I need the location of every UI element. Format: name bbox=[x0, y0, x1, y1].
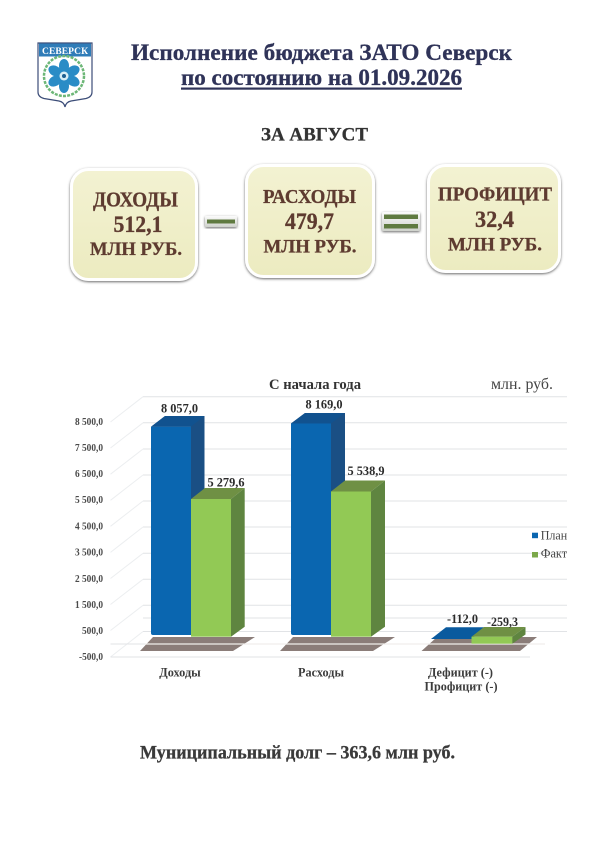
title: по состоянию на 01.09.2026 bbox=[181, 65, 462, 90]
bars: deficit / surplus bbox=[431, 627, 526, 644]
y axis labels: 8 500,0 bbox=[75, 417, 103, 428]
icon: minus sign bbox=[205, 216, 237, 227]
y axis labels: 3 500,0 bbox=[75, 548, 103, 558]
panel: surplus: 32,4 bbox=[475, 207, 514, 232]
panel: income: МЛН РУБ. bbox=[90, 239, 182, 260]
category labels: Дефицит (-) bbox=[428, 665, 493, 680]
category labels: Расходы bbox=[298, 665, 344, 680]
subheading: for August: ЗА АВГУСТ bbox=[261, 125, 368, 146]
category labels bbox=[159, 665, 498, 694]
value labels bbox=[161, 398, 518, 629]
value labels: 8 057,0 bbox=[161, 402, 198, 416]
bar shadows bbox=[140, 637, 537, 651]
y axis labels: 5 500,0 bbox=[75, 495, 103, 506]
panel: income: ДОХОДЫ bbox=[93, 188, 178, 212]
y axis labels bbox=[75, 417, 103, 663]
bars: expenses bbox=[291, 413, 385, 637]
panel: income bbox=[72, 170, 196, 280]
y axis labels: 7 500,0 bbox=[75, 443, 103, 454]
y axis labels: 4 500,0 bbox=[75, 522, 103, 532]
category labels: Доходы bbox=[159, 665, 201, 680]
panel: expenses: 479,7 bbox=[285, 209, 334, 234]
icon: equals sign bbox=[382, 212, 420, 231]
logo: Seversk coat of arms bbox=[38, 43, 92, 107]
value labels: 8 169,0 bbox=[306, 398, 342, 412]
title bbox=[131, 40, 513, 90]
legend: Факт bbox=[541, 546, 567, 561]
y axis labels: 500,0 bbox=[82, 626, 103, 637]
value labels: -112,0 bbox=[447, 612, 478, 626]
y axis labels: -500,0 bbox=[79, 652, 103, 663]
value labels: -259,3 bbox=[487, 615, 518, 629]
panel: expenses: МЛН РУБ. bbox=[264, 237, 356, 258]
logo: Seversk coat of arms: СЕВЕРСК bbox=[42, 47, 88, 57]
value labels: 5 279,6 bbox=[208, 476, 244, 490]
panel: income: 512,1 bbox=[114, 212, 162, 237]
unit label: млн. руб. bbox=[491, 376, 553, 393]
title: Исполнение бюджета ЗАТО Северск bbox=[131, 40, 513, 65]
y axis labels: 2 500,0 bbox=[75, 574, 103, 585]
chart title: С начала года bbox=[269, 377, 362, 393]
panel: surplus bbox=[428, 166, 560, 272]
footer: municipal debt: Муниципальный долг – 363,6 млн руб. bbox=[140, 742, 455, 764]
panel: expenses: РАСХОДЫ bbox=[263, 186, 356, 208]
legend bbox=[532, 528, 567, 561]
value labels: 5 538,9 bbox=[348, 464, 384, 478]
bar chart: since start of year bbox=[75, 376, 567, 694]
y axis labels: 6 500,0 bbox=[75, 469, 103, 480]
bars: income bbox=[151, 416, 245, 637]
y axis labels: 1 500,0 bbox=[75, 600, 103, 611]
panel: surplus: ПРОФИЦИТ bbox=[438, 184, 553, 206]
panel: surplus: МЛН РУБ. bbox=[448, 235, 542, 256]
panel: expenses bbox=[246, 166, 374, 276]
legend: План bbox=[541, 528, 567, 542]
category labels: Профицит (-) bbox=[424, 679, 498, 694]
